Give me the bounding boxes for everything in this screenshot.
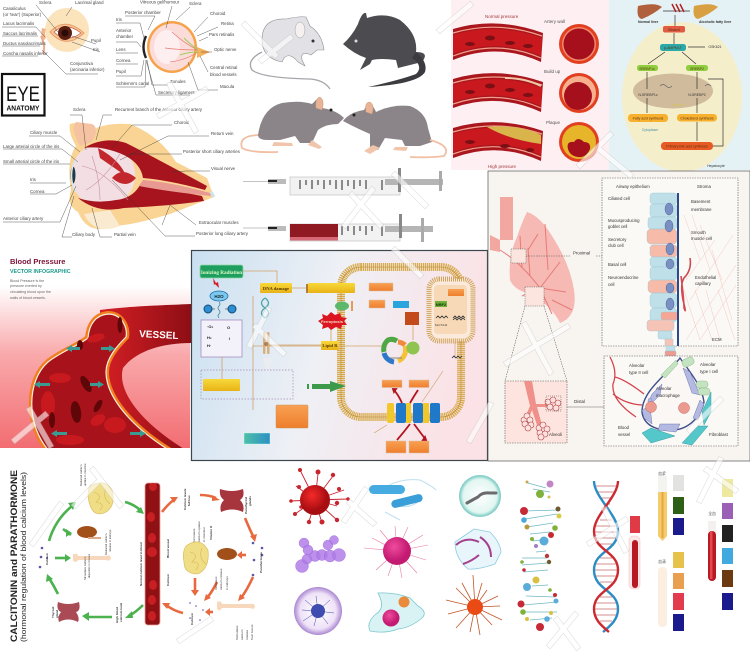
heading: blood pressure: VECTOR INFOGRAPHIC (10, 269, 71, 275)
orange arrows (162, 495, 254, 613)
icon: serum tube (658, 471, 667, 541)
eye anatomy labels and leader lines: Schlemm's canal (116, 81, 149, 86)
water radiolysis (204, 291, 236, 318)
eye anatomy labels and leader lines: Iris (93, 47, 100, 52)
artery labels: Plaque (546, 120, 561, 125)
panel: artery blood pressure (451, 0, 609, 170)
label: VESSEL: VESSEL (139, 329, 179, 342)
orange pathway boxes (276, 283, 429, 453)
eye anatomy labels and leader lines: Posterior long ciliary artery (196, 231, 249, 236)
icon: filled syringe (243, 214, 433, 242)
pathway boxes: Hepatocyte (707, 164, 725, 168)
rotated title: (hormonal regulation of blood calcium levels) (19, 471, 28, 642)
airway labels: Smooth (691, 230, 706, 235)
reactive species box: ·O₂ (207, 324, 213, 329)
calcitonin pathway labels: Calcium (166, 574, 170, 586)
pathway boxes: GSK621 (708, 45, 722, 49)
alveolus labels: Fibroblast (709, 432, 729, 437)
eye anatomy labels and leader lines: Cornea (116, 58, 131, 63)
calcitonin pathway labels: deposition in bones (87, 553, 91, 578)
alveolus labels: vessel (618, 432, 630, 437)
calcitonin pathway labels: fall low (187, 495, 191, 506)
blood vessels (610, 357, 644, 417)
pathway boxes: SREBP1c (639, 67, 655, 71)
eye anatomy labels and leader lines: Ductus nasolacrimalis (3, 41, 47, 46)
calcitonin pathway labels: Stimulates calcium (83, 556, 87, 580)
calcitonin pathway labels: glands (248, 496, 252, 506)
DNA strand and chromosome (201, 298, 293, 399)
calcitonin pathway labels: uptake in intestine (83, 463, 87, 486)
icon: beaded DNA helix (518, 480, 562, 631)
membrane protein (306, 284, 353, 311)
alveolus labels: Alveolar (656, 386, 672, 391)
endothelial capillary (681, 258, 690, 311)
reactive species box: I (229, 336, 230, 341)
icon: lung with bronchial tree (490, 197, 575, 323)
eye anatomy labels and leader lines: Saccus lacrimalis (3, 31, 38, 36)
callout boxes from the lung (511, 249, 544, 306)
icon: grey rat facing left (343, 102, 446, 157)
artery labels: High pressure (488, 164, 517, 169)
icon: kidneys (77, 526, 237, 560)
calcitonin pathway labels: in kidneys (225, 576, 229, 590)
airway labels: Mucusproducing (608, 218, 640, 223)
ferroptosis burst (318, 312, 347, 330)
calcitonin pathway labels: Calcium (190, 613, 194, 625)
calcitonin pathway labels: in intestine (202, 527, 206, 542)
radiation source box (200, 265, 243, 288)
eye anatomy labels and leader lines: Posterior short ciliary arteries (183, 149, 241, 154)
icon: red and blue DNA double helix (594, 481, 618, 632)
panel: lung airway and alveoli (488, 171, 750, 461)
proximal label (526, 250, 602, 257)
label: EYE ANATOMY: EYE (6, 83, 40, 106)
icon: bones (73, 554, 255, 610)
calcitonin pathway labels: High blood (115, 607, 119, 623)
icon: red virus (289, 468, 350, 524)
airway epithelial cells (647, 193, 678, 356)
colour swatches (673, 475, 733, 631)
alveolar wall (642, 358, 704, 430)
icon: whole blood tube (708, 511, 716, 581)
calcitonin pathway labels: calcium uptake (197, 521, 201, 542)
calcitonin pathway labels: Stimulates (235, 625, 239, 640)
icon: bubble bacterium (459, 475, 501, 517)
reactive species box: O (227, 325, 230, 330)
illustration: vessel with blood cells and pressure arrows (32, 304, 191, 452)
airway labels: cell (608, 282, 614, 287)
eye anatomy labels and leader lines: Partial vein (114, 232, 136, 237)
panel: alveolus detail (604, 356, 738, 446)
reactive species box: H· (207, 343, 211, 348)
cell nuclei (665, 203, 674, 310)
icon: grey rat facing right (241, 97, 344, 152)
eye anatomy labels and leader lines: Extraocular muscles (199, 220, 239, 225)
calcitonin pathway labels: Increases (192, 528, 196, 542)
airway labels: capillary (695, 281, 712, 286)
eye anatomy labels and leader lines: Anterior ciliary artery (3, 216, 44, 221)
inhibitor lines (374, 342, 462, 433)
alveolus labels: Alveolar (629, 363, 645, 368)
airway labels: ECM (712, 337, 722, 342)
zoom lines to alveoli (505, 306, 567, 381)
pathway boxes: N-SREBP2 (688, 93, 706, 97)
icon: black mouse (343, 13, 426, 87)
airway labels: Stroma (697, 184, 711, 189)
eye anatomy labels and leader lines: Choroid (210, 11, 226, 16)
calcitonin pathway labels: release in kidneys (108, 529, 112, 552)
icon: lilac cell (294, 587, 342, 635)
type II cells (661, 356, 710, 395)
icon: serum tube: 血浆 (658, 471, 666, 476)
macrophages (646, 402, 690, 414)
calcium dots (39, 542, 263, 621)
calcitonin pathway labels: Increases (214, 576, 218, 590)
pathway boxes: SREBP2 (690, 67, 704, 71)
icon: intestines (88, 483, 208, 574)
eye anatomy labels and leader lines: Retina (221, 21, 234, 26)
icon: pink spiked cell (364, 526, 428, 578)
eye anatomy labels and leader lines: Lacus lacrimalis (3, 21, 35, 26)
eye anatomy labels and leader lines: chamber (116, 34, 134, 39)
icon: white mouse (250, 17, 330, 89)
label: EYE ANATOMY (2, 74, 44, 116)
airway labels: Ciliated cell (608, 196, 630, 201)
eye anatomy labels and leader lines: Central retinal (210, 65, 237, 70)
heading: blood pressure: Blood Pressure (10, 257, 65, 266)
icon: whole blood tube: 全血 (708, 511, 716, 516)
panel: alveoli inset (505, 381, 567, 443)
eye anatomy labels and leader lines: Recurrent branch of the anterior ciliary artery (115, 107, 203, 112)
distal label (567, 399, 604, 407)
icon: normal liver (638, 4, 662, 24)
eye anatomy labels and leader lines: Conjunctiva (70, 61, 93, 66)
alveolus labels: type II cell (629, 370, 648, 375)
panel: alveoli inset: Alveoli (549, 432, 562, 437)
airway labels: Endothelial (695, 275, 716, 280)
eye anatomy labels and leader lines: (arcinaria inferior) (70, 67, 105, 72)
eye anatomy labels and leader lines: Canaliculus (3, 6, 27, 11)
panel: calcitonin and parathormone (9, 463, 263, 642)
rotated title: CALCITONIN and PARATHORMONE (9, 470, 19, 642)
nucleus: SLC7A11 (435, 323, 448, 327)
calcitonin pathway labels (45, 463, 263, 640)
basement membrane (677, 193, 679, 346)
nucleus (429, 279, 473, 341)
icon: parathyroid gland (220, 489, 244, 512)
pathway boxes: Nucleus (672, 103, 685, 107)
airway labels: club cell (608, 243, 624, 248)
artery labels: Build up (544, 69, 561, 74)
label: EYE ANATOMY: ANATOMY (6, 104, 40, 112)
water radiolysis: H2O (214, 294, 224, 299)
eye anatomy labels and leader lines: Return vein (211, 131, 234, 136)
description text (10, 279, 51, 300)
airway labels: goblet cell (608, 224, 627, 229)
calcitonin pathway labels: Parathormone (259, 552, 263, 573)
icon: eye cross section with muscles and nerve (69, 122, 214, 229)
green arrows (49, 502, 143, 617)
description text: circulating blood upon the (10, 290, 51, 294)
calcitonin pathway labels: Calcium levels (183, 488, 187, 510)
pathway boxes: Ethanol (668, 28, 680, 32)
eye anatomy labels and leader lines: Ciliary muscle (30, 130, 58, 135)
calcitonin pathway labels: Reduced calcium (104, 533, 108, 555)
panel: laboratory mice and rats (241, 13, 446, 242)
DNA damage and lipid boxes (203, 283, 355, 391)
icon: purple cell cluster (296, 536, 346, 572)
eye anatomy labels and leader lines: Pupil (116, 69, 126, 74)
pathway boxes (628, 26, 725, 168)
alveolus labels: type I cell (700, 369, 718, 374)
calcitonin pathway labels: Reduced calcium (79, 464, 83, 486)
artery labels: Normal pressure (485, 14, 519, 19)
pathway boxes: Cholesterol synthesis (680, 116, 714, 120)
DNA damage and lipid boxes: DNA damage (263, 286, 289, 291)
DNA damage and lipid boxes: Lipid R (322, 343, 338, 348)
alveolus labels (618, 362, 729, 437)
eye anatomy labels and leader lines: Anterior (116, 28, 132, 33)
eye anatomy labels and leader lines: Large arterial circle of the iris (3, 144, 60, 149)
pressure arrows (34, 345, 146, 437)
eye anatomy labels and leader lines: Choroid (174, 120, 190, 125)
connector lines (222, 271, 413, 410)
wall cells (642, 368, 704, 432)
calcitonin pathway labels: release (245, 630, 249, 640)
icon: blood collection tube with cap (629, 516, 640, 589)
heading: blood pressure (10, 257, 71, 275)
panel: eye anatomy (2, 0, 249, 237)
red transport arrows (393, 389, 426, 440)
pathway boxes: Primary bile acid synthesis (666, 144, 708, 148)
airway labels: Basal cell (608, 262, 626, 267)
eye anatomy labels and leader lines: (or 'tear') (Superior) (3, 12, 42, 17)
nucleus: NRF2 (436, 302, 447, 307)
stroma fibres (684, 215, 736, 340)
pathway boxes: N-SREBP1c (638, 93, 658, 97)
eye anatomy labels and leader lines: Visual nerve (211, 166, 236, 171)
eye anatomy labels and leader lines: blood vessels (210, 72, 237, 77)
icon: fatty liver: Alcoholic fatty liver (699, 20, 732, 24)
teal box (244, 433, 270, 444)
pathway arrows (647, 4, 723, 146)
description text: pressure exerted by (10, 284, 42, 288)
eye anatomy labels and leader lines: Macula (220, 84, 235, 89)
eye anatomy labels and leader lines: Lacrimal gland (75, 0, 104, 5)
eye anatomy labels and leader lines: Optic nerve (214, 47, 237, 52)
eye anatomy labels and leader lines: Sclera (39, 0, 52, 5)
airway labels: Neuroendocrine (608, 275, 639, 280)
eye anatomy labels and leader lines: Posterior chamber (125, 10, 161, 15)
eye anatomy labels and leader lines: Iris (30, 177, 37, 182)
rotated title (9, 470, 28, 642)
eye anatomy labels and leader lines: Pars retinalis (209, 32, 235, 37)
airway labels: muscle cell (691, 236, 712, 241)
cell membrane (341, 267, 461, 417)
airway labels: Basement (691, 199, 711, 204)
artery: build up (453, 73, 599, 113)
calcitonin pathway labels: from bones (250, 624, 254, 640)
eye anatomy labels and leader lines: Iris (116, 17, 123, 22)
ion channels (387, 403, 440, 423)
icon: normal liver: Normal liver (638, 20, 659, 24)
brown enzyme block (405, 312, 419, 325)
pathway boxes: Fatty acid synthesis (633, 116, 664, 120)
calcitonin pathway labels: Normal calcium level in blood (139, 542, 143, 586)
eye anatomy labels and leader lines: Ciliary body (72, 232, 96, 237)
panel: ionizing radiation ferroptosis pathway (192, 250, 488, 460)
alveolus labels: Blood (618, 425, 630, 430)
enzyme complex (384, 339, 420, 362)
airway labels: Secretory (608, 237, 627, 242)
calcitonin pathway labels: Vitamin D (209, 525, 213, 540)
icon: pale plasma tube (658, 559, 667, 627)
eye anatomy labels and leader lines: Small arterial circle of the iris (3, 159, 60, 164)
pathway boxes: Cytoplasm (642, 128, 658, 132)
calcitonin pathway labels: gland (55, 610, 59, 618)
reactive species box: H₂ (207, 335, 212, 340)
calcitonin pathway labels: Calcium (45, 553, 49, 565)
pathway boxes: p-AMPK/LT (664, 46, 683, 50)
artery: plaque (453, 122, 599, 162)
icon: blue bacteria (369, 480, 436, 520)
eye anatomy labels and leader lines: Sclera (73, 107, 86, 112)
artery labels (485, 14, 565, 169)
icon: pale plasma tube: 血清 (658, 559, 666, 564)
artery: normal pressure (453, 23, 599, 64)
blue box (393, 301, 409, 308)
panel: alcoholic fatty liver signalling (609, 0, 750, 172)
eye anatomy labels and leader lines: Sclera (189, 1, 202, 6)
eye anatomy labels and leader lines: Zonules (170, 79, 186, 84)
icon: cell with two nuclei (369, 593, 424, 632)
icon: fatty liver (694, 4, 732, 24)
icon: pale blue crystal cell (455, 529, 501, 569)
panel: blood pressure infographic (0, 258, 191, 448)
icon: green arrow (307, 381, 346, 392)
blood vessel column (145, 483, 160, 625)
calcitonin pathway labels: calcium level (119, 603, 123, 622)
ferroptosis burst: Ferroptosis (321, 319, 344, 324)
icon: front view of the eye (41, 8, 89, 54)
calcitonin pathway labels: calcium release (219, 568, 223, 590)
airway labels: membrane (691, 207, 712, 212)
alveolus labels: Alveolar (700, 362, 716, 367)
proximal label: Proximal (573, 250, 590, 256)
panel: pathogens and cells (289, 468, 733, 635)
eye anatomy labels and leader lines: Concha nasalis inferior (3, 51, 48, 56)
reactive species box (201, 320, 242, 357)
calcitonin pathway labels: Thyroid (51, 607, 55, 618)
description text: Blood Pressure is the (10, 279, 44, 283)
description text: walls of blood vessels. (10, 296, 46, 300)
radiation source box: Ionizing Radiation (201, 270, 242, 276)
icon: thyroid gland (57, 602, 80, 622)
eye anatomy labels and leader lines: Lens (116, 47, 126, 52)
eye anatomy labels and leader lines (2, 0, 249, 237)
artery labels: Artery wall (544, 19, 565, 24)
calcitonin pathway labels: Parathyroid (244, 497, 248, 514)
distal label: Distal (574, 399, 585, 404)
panel: airway detail (602, 178, 738, 356)
airway labels: Airway epithelium (616, 184, 650, 189)
icon: orange star cell (446, 575, 502, 635)
eye anatomy labels and leader lines: Secretory ligament (158, 90, 195, 95)
calcitonin pathway labels: Blood vessel (166, 539, 170, 558)
icon: empty syringe (243, 168, 443, 195)
airway labels (608, 184, 722, 342)
icon: side view of the eyeball (144, 21, 210, 73)
calcitonin pathway labels: calcium (240, 629, 244, 640)
fibroblasts (642, 392, 711, 445)
eye anatomy labels and leader lines: Pupil (91, 38, 101, 43)
eye anatomy labels and leader lines: Cornea (30, 189, 45, 194)
alveolus labels: macrophage (656, 393, 680, 398)
